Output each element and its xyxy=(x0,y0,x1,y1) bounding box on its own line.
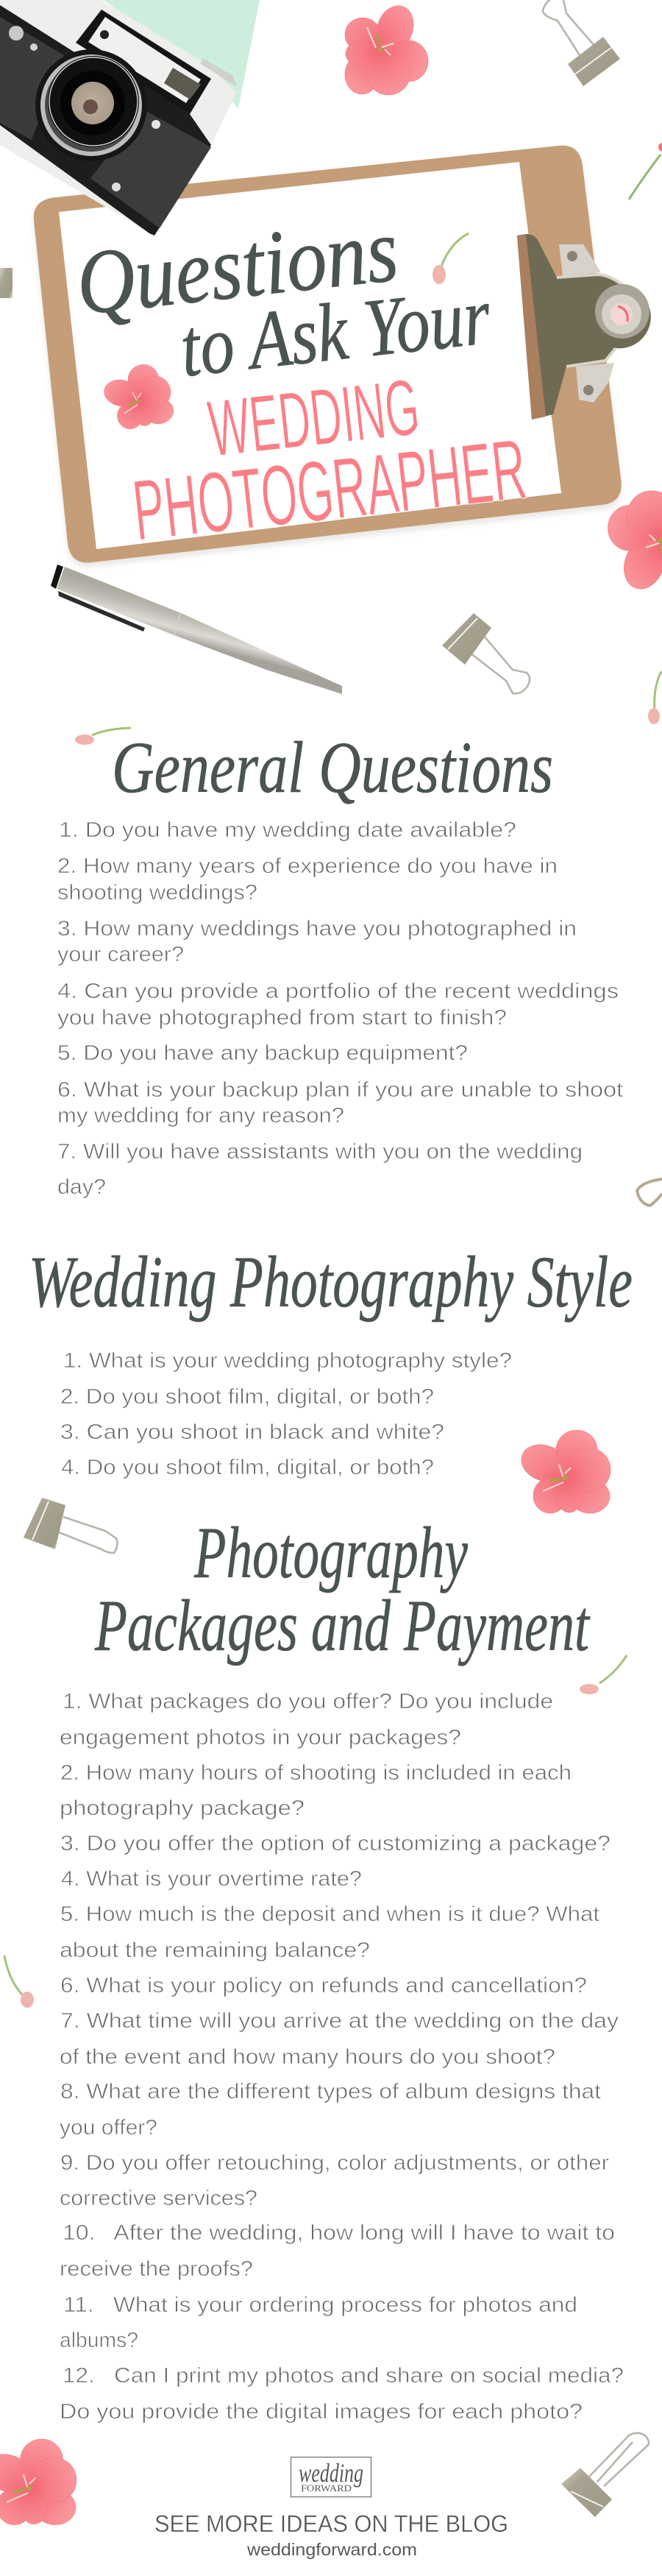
question 8: you offer? xyxy=(60,2116,157,2140)
question 2: 2. How many hours of shooting is included in each xyxy=(60,1761,572,1785)
logo: wedding forward xyxy=(291,2457,371,2497)
heading: photography: Photography xyxy=(193,1512,468,1593)
question 6: 6. What is your backup plan if you are unable to shoot xyxy=(57,1078,623,1102)
paper sheet xyxy=(59,162,561,549)
panel: general questions xyxy=(57,726,623,1199)
website url: weddingforward.com xyxy=(246,2540,417,2559)
question 3: 3. Do you offer the option of customizing a package? xyxy=(60,1832,611,1855)
question 7: 7. What time will you arrive at the wedding on the day xyxy=(60,2009,619,2033)
panel: hero photo flat lay xyxy=(0,0,662,745)
panel: footer xyxy=(0,2433,649,2559)
flower: right edge xyxy=(608,491,662,595)
question 7: day? xyxy=(57,1175,106,1199)
pen xyxy=(51,565,342,694)
question 2: photography package? xyxy=(60,1797,305,1820)
question 12 xyxy=(60,2364,624,2424)
question 5 xyxy=(60,1903,599,1962)
question 1 xyxy=(60,1690,553,1749)
binder clip loop: right edge xyxy=(637,1179,662,1206)
question 11: 11. What is your ordering process for photos and xyxy=(63,2293,577,2317)
question 8 xyxy=(60,2080,601,2140)
title line: Questions: Questions xyxy=(71,199,402,334)
flower fragment: right edge top xyxy=(658,143,662,152)
logo: wedding forward: FORWARD xyxy=(301,2483,352,2494)
question 4: 4. What is your overtime rate? xyxy=(61,1867,362,1891)
binder clip: middle xyxy=(442,613,530,693)
stem with bud: right edge xyxy=(648,671,661,724)
question 2: 2. Do you shoot film, digital, or both? xyxy=(60,1385,434,1409)
clip hub xyxy=(595,284,649,339)
stem: top right xyxy=(629,155,661,199)
question 10: receive the proofs? xyxy=(60,2257,253,2281)
question 7: 7. Will you have assistants with you on the wedding xyxy=(57,1140,583,1164)
flower: bottom left xyxy=(0,2439,76,2524)
question 5: about the remaining balance? xyxy=(60,1939,370,1962)
flower: on paper xyxy=(96,361,176,433)
question 9 xyxy=(60,2151,609,2210)
question 1: engagement photos in your packages? xyxy=(60,1726,461,1749)
call to action: SEE MORE IDEAS ON THE BLOG xyxy=(154,2510,508,2537)
question 3: 3. How many weddings have you photographed in xyxy=(57,917,577,941)
title line: to Ask Your: to Ask Your xyxy=(176,270,495,394)
question 9: corrective services? xyxy=(60,2187,257,2210)
question 12: 12. Can I print my photos and share on social media? xyxy=(63,2364,624,2388)
flower: top centre xyxy=(345,1,428,95)
question 6 xyxy=(57,1078,623,1128)
question 10 xyxy=(60,2221,615,2281)
binder clip: top right xyxy=(543,0,620,86)
clip fragment: left edge xyxy=(0,268,13,298)
question 1: 1. What is your wedding photography style? xyxy=(63,1349,512,1373)
heading: general questions: General Questions xyxy=(112,726,553,808)
bud: left of packages list xyxy=(4,1956,34,2008)
question 3: 3. Can you shoot in black and white? xyxy=(60,1420,444,1444)
flower: right of style list xyxy=(516,1430,611,1513)
question 1: 1. What packages do you offer? Do you include xyxy=(63,1690,553,1713)
question 10: 10. After the wedding, how long will I have to wait to xyxy=(63,2221,615,2245)
panel: wedding photography style xyxy=(29,1241,633,1479)
question 8: 8. What are the different types of album designs that xyxy=(60,2080,601,2103)
question 4 xyxy=(57,980,619,1030)
binder clip: bottom right xyxy=(561,2433,649,2517)
question 7 xyxy=(60,2009,619,2069)
panel: packages and payment xyxy=(60,1512,624,2424)
metal clipboard clip xyxy=(517,234,651,420)
question 1: 1. Do you have my wedding date available? xyxy=(59,818,516,842)
question 3: your career? xyxy=(57,943,184,966)
question 3 xyxy=(57,917,577,966)
question 7 xyxy=(57,1140,583,1199)
title xyxy=(71,199,531,559)
question 6: my wedding for any reason? xyxy=(57,1104,344,1128)
title line: WEDDING: WEDDING xyxy=(204,362,424,473)
question 2: 2. How many years of experience do you have in xyxy=(57,854,558,878)
stem with bud: above general questions xyxy=(75,728,131,745)
question 5: 5. Do you have any backup equipment? xyxy=(57,1041,468,1065)
bud: on paper xyxy=(433,233,469,284)
question 4: you have photographed from start to finish? xyxy=(57,1006,507,1030)
binder clip: left xyxy=(24,1498,117,1553)
question 4: 4. Can you provide a portfolio of the recent weddings xyxy=(57,980,619,1003)
question 4: 4. Do you shoot film, digital, or both? xyxy=(61,1456,434,1479)
question 12: Do you provide the digital images for each photo? xyxy=(60,2400,583,2424)
question 9: 9. Do you offer retouching, color adjustments, or other xyxy=(60,2151,609,2175)
question 7: of the event and how many hours do you shoot? xyxy=(60,2045,555,2069)
question 2: shooting weddings? xyxy=(57,881,257,905)
question 11 xyxy=(60,2293,577,2352)
question 2 xyxy=(60,1761,572,1820)
camera lens xyxy=(35,49,147,161)
question 11: albums? xyxy=(60,2329,138,2352)
question 2 xyxy=(57,854,558,905)
clipboard xyxy=(34,146,622,567)
bud: right of packages heading xyxy=(580,1655,627,1694)
question 6: 6. What is your policy on refunds and cancellation? xyxy=(60,1974,587,1998)
camera xyxy=(0,0,237,236)
mint paper xyxy=(104,0,260,108)
logo: wedding forward: wedding xyxy=(299,2458,363,2488)
question 5: 5. How much is the deposit and when is it due? What xyxy=(60,1903,599,1926)
